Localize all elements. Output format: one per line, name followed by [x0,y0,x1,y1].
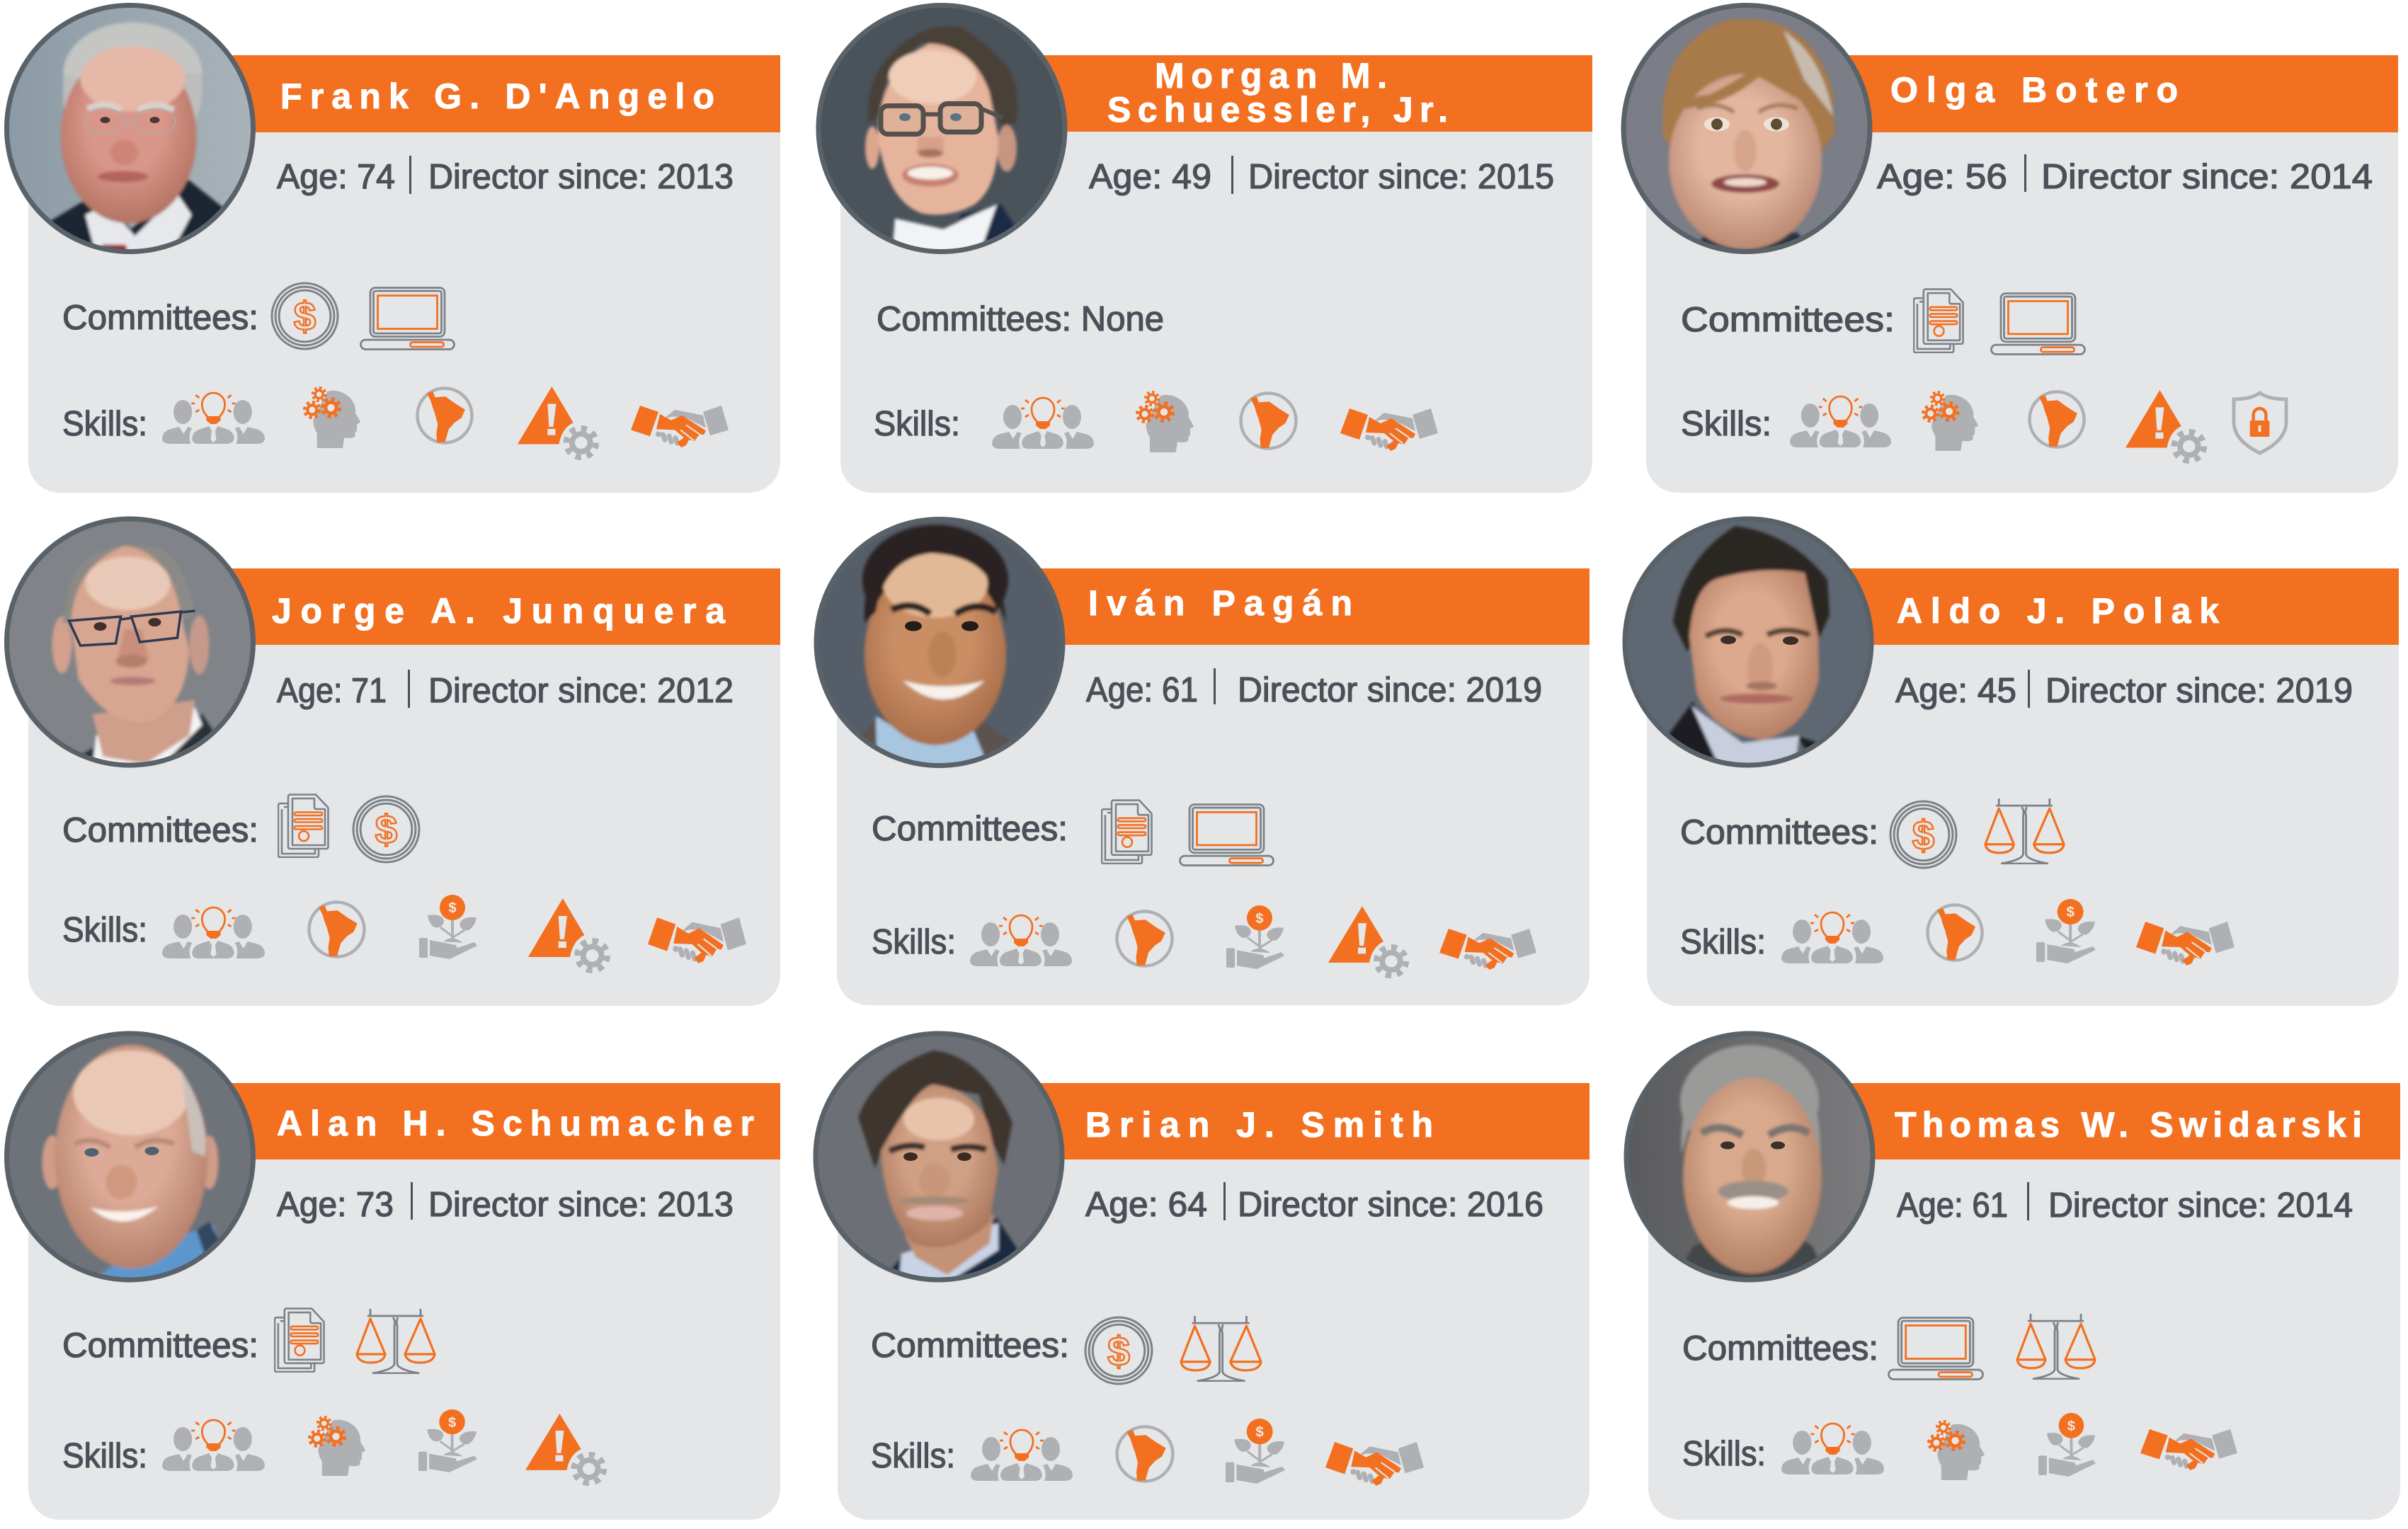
age: Age: 49 [1089,158,1211,196]
director since: Director since: 2019 [2045,672,2353,710]
icon: Latin America globe [309,902,364,957]
age: Age: 61 [1086,671,1198,709]
panel background [28,85,780,493]
name banner [1748,568,2399,645]
name: Schuessler, Jr. [1107,90,1448,130]
icon: handshake [1340,408,1438,451]
icon: compensation document [1102,801,1151,864]
card: Aldo J. Polak [1622,516,2399,1006]
committees label: Committees: [1680,813,1878,852]
skills label: Skills: [62,405,147,443]
card: Olga Botero [1621,3,2398,493]
icon: risk warning [528,898,607,970]
name [1107,56,1448,130]
icon: technology committee laptop [1889,1318,1982,1379]
committees label: Committees: [872,810,1068,848]
separator [2028,670,2030,708]
skills label: Skills: [1681,405,1771,443]
name: Brian J. Smith [1085,1105,1433,1145]
portrait photo [1624,1031,1876,1283]
icon: leadership people [1781,912,1883,963]
panel background [28,1113,780,1520]
icon: Latin America globe [418,388,472,443]
icon: governance scales [1985,798,2064,864]
icon: technology committee laptop [1180,804,1273,866]
name: Frank G. D'Angelo [280,76,714,116]
portrait photo [813,1031,1065,1283]
card: Frank G. D'Angelo [4,3,780,493]
card: Morgan M. Schuessler, Jr. [816,3,1592,493]
icon: leadership people [162,393,265,444]
icon: audit committee coin [1890,801,1956,868]
icon: governance scales [1181,1316,1261,1381]
icon: risk warning [525,1414,604,1483]
icon: finance plant [1226,905,1284,969]
icon: head with gears [1923,392,1978,451]
name banner [940,568,1590,645]
icon: leadership people [162,907,265,958]
age: Age: 74 [277,158,395,196]
portrait photo [1622,516,1874,768]
panel background [1646,85,2398,493]
icon: risk warning [1328,906,1406,975]
committees label: Committees: [62,1327,258,1365]
icon: leadership people [1781,1424,1884,1474]
card: Brian J. Smith [813,1031,1590,1520]
name banner [1750,1083,2400,1159]
icon: audit committee coin [1085,1317,1152,1384]
skills label: Skills: [874,405,960,443]
portrait photo [4,3,256,255]
card: Jorge A. Junquera [4,516,780,1006]
name banner [942,55,1592,132]
age: Age: 56 [1877,158,2007,196]
director since: Director since: 2015 [1248,158,1554,196]
icon: risk warning [518,386,596,457]
icon: leadership people [992,398,1094,449]
panel background [838,1113,1590,1520]
icon: Latin America globe [2029,392,2084,447]
committees: Committees: None [877,300,1164,338]
separator [411,1182,413,1220]
panel background [28,599,780,1006]
separator [1214,668,1216,704]
name banner [130,55,780,132]
committees label: Committees: [62,811,258,849]
name: Olga Botero [1890,70,2178,110]
icon: Latin America globe [1117,1427,1172,1481]
name banner [130,1083,780,1159]
skills label: Skills: [62,1437,147,1475]
card: Thomas W. Swidarski [1624,1031,2400,1520]
name: Aldo J. Polak [1897,591,2219,631]
panel background [1648,1113,2400,1520]
director since: Director since: 2014 [2048,1186,2353,1225]
portrait photo [814,517,1066,769]
icon: finance plant [2038,1413,2096,1477]
panel background [840,85,1592,493]
icon: head with gears [309,1417,365,1476]
portrait photo [4,516,256,768]
committees label: Committees: [1682,1329,1878,1368]
separator [409,156,411,194]
icon: handshake [648,917,746,963]
panel background [837,599,1590,1005]
icon: head with gears [1137,392,1194,452]
icon: risk warning [2125,390,2204,461]
director since: Director since: 2013 [428,1186,734,1224]
icon: audit committee coin [272,283,338,349]
icon: governance scales [2017,1314,2095,1379]
icon: head with gears [1929,1421,1985,1480]
icon: handshake [1325,1442,1424,1486]
icon: handshake [631,406,729,447]
separator [408,670,410,708]
age: Age: 73 [277,1186,394,1224]
age: Age: 45 [1895,672,2016,710]
separator [2027,1182,2029,1220]
icon: compensation document [275,1309,324,1372]
director since: Director since: 2012 [428,672,734,710]
panel background [1647,599,2399,1006]
icon: governance scales [357,1309,435,1373]
name: Morgan M. [1155,56,1387,96]
icon: technology committee laptop [361,287,455,350]
skills label: Skills: [1680,923,1766,961]
director since: Director since: 2016 [1238,1186,1543,1224]
icon: compensation document [278,794,329,857]
name banner [939,1083,1590,1159]
director since: Director since: 2019 [1238,671,1542,709]
icon: Latin America globe [1927,905,1982,960]
portrait photo [1621,3,1873,255]
name banner [130,568,780,645]
skills label: Skills: [62,911,147,949]
skills label: Skills: [1682,1435,1766,1473]
skills label: Skills: [871,1437,955,1475]
icon: leadership people [971,1430,1073,1481]
director since: Director since: 2014 [2041,158,2373,196]
icon: compensation document [1914,290,1963,353]
age: Age: 71 [277,672,387,710]
icon: finance plant [1226,1419,1285,1484]
name: Thomas W. Swidarski [1895,1105,2362,1145]
age: Age: 61 [1897,1186,2008,1225]
icon: handshake [2136,922,2235,966]
portrait photo [816,3,1068,255]
skills label: Skills: [872,923,956,961]
icon: leadership people [162,1420,265,1471]
card: Iván Pagán [814,517,1590,1005]
name: Iván Pagán [1088,583,1352,623]
icon: finance plant [2036,899,2096,963]
card: Alan H. Schumacher [4,1031,780,1520]
icon: cybersecurity shield [2234,393,2286,453]
icon: handshake [2140,1429,2237,1470]
age: Age: 64 [1085,1186,1207,1224]
committees label: Committees: [62,299,258,337]
director since: Director since: 2013 [428,158,734,196]
icon: Latin America globe [1241,394,1296,448]
icon: finance plant [419,895,477,959]
separator [1231,156,1233,194]
icon: finance plant [418,1409,477,1472]
name: Jorge A. Junquera [272,591,726,631]
separator [2024,154,2026,192]
icon: Latin America globe [1117,912,1172,966]
icon: leadership people [1790,396,1891,447]
icon: leadership people [970,915,1072,966]
icon: audit committee coin [353,796,419,862]
icon: handshake [1439,929,1536,970]
committees label: Committees: [871,1327,1069,1365]
name banner [1747,55,2398,132]
committees label: Committees: [1681,301,1895,339]
name: Alan H. Schumacher [277,1104,754,1143]
separator [1223,1182,1226,1220]
icon: head with gears [304,388,360,448]
portrait photo [4,1031,256,1283]
icon: technology committee laptop [1991,293,2084,355]
